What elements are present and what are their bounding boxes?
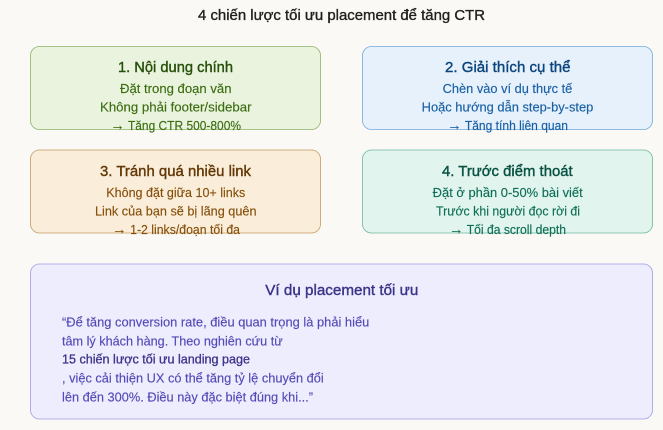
quote line 2: tâm lý khách hàng. Theo nghiên cứu từ (62, 334, 283, 348)
quote line 4: , việc cải thiện UX có thể tăng tỷ lệ chuyển đổi (62, 372, 324, 386)
panel: 1. Nội dung chính (30, 46, 320, 134)
heading: Giải thích cụ thể: 2. Giải thích cụ thể (445, 59, 570, 76)
quote line 1: “Để tăng conversion rate, điều quan trọng là phải hiểu (62, 316, 369, 330)
text: ví dụ thực tế: Chèn vào ví dụ thực tế (443, 82, 572, 96)
heading: Nội dung chính: 1. Nội dung chính (118, 59, 233, 76)
text: trước khi rời đi: Trước khi người đọc rời đi (436, 204, 580, 218)
text: scroll depth: → Tối đa scroll depth (449, 221, 566, 238)
heading: Tránh quá nhiều link: 3. Tránh quá nhiều link (100, 163, 251, 180)
text: tăng tính liên quan: → Tăng tính liên quan (447, 117, 568, 134)
text: step-by-step: Hoặc hướng dẫn step-by-step (422, 100, 593, 114)
panel: 4. Trước điểm thoát (362, 150, 652, 238)
panel: ví dụ placement (30, 264, 652, 419)
title: 4 chiến lược tối ưu placement để tăng CTR (198, 8, 485, 24)
text: phần 0-50%: Đặt ở phần 0-50% bài viết (433, 186, 583, 200)
text: tăng CTR: → Tăng CTR 500-800% (110, 117, 241, 134)
panel: 2. Giải thích cụ thể (362, 46, 652, 134)
heading: Ví dụ placement tối ưu: Ví dụ placement tối ưu (265, 282, 418, 299)
text: bị lãng quên: Link của bạn sẽ bị lãng quên (95, 204, 257, 218)
quote line 5: lên đến 300%. Điều này đặc biệt đúng khi...” (62, 390, 313, 404)
quote link: 15 chiến lược tối ưu landing page (62, 352, 250, 366)
text: không đặt giữa 10+ links: Không đặt giữa 10+ links (106, 186, 245, 200)
text: không phải footer: Không phải footer/sidebar (100, 100, 252, 114)
text: trong đoạn văn: Đặt trong đoạn văn (120, 82, 232, 96)
text: 1-2 links/đoạn: → 1-2 links/đoạn tối đa (112, 221, 240, 238)
heading: Trước điểm thoát: 4. Trước điểm thoát (442, 163, 574, 180)
panel: 3. Tránh quá nhiều link (30, 150, 320, 238)
